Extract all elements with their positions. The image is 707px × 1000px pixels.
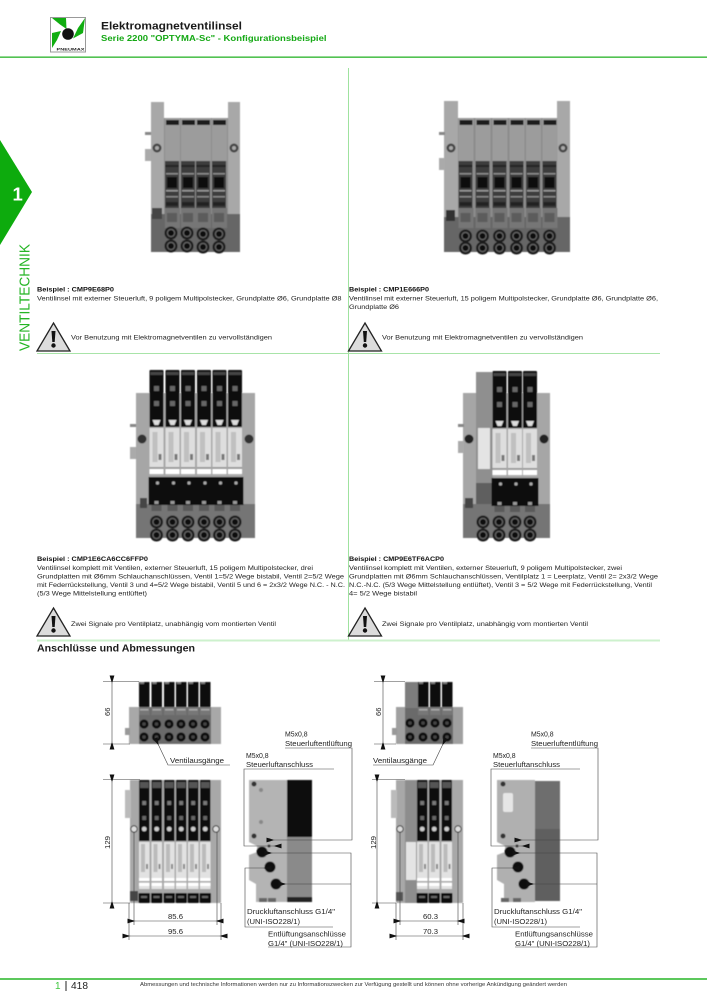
drawing: left side view with callouts: G1/4" (UNI-ISO228/1) <box>268 941 343 948</box>
header logo: PNEUMAX <box>56 46 85 52</box>
text: example 2 <box>349 286 658 311</box>
text: example 3: Beispiel : CMP1E6CA6CC6FFP0 <box>37 556 148 563</box>
photo: valve island CMP9E6TF6ACP0 <box>458 371 550 542</box>
drawing: right front view: 60.3 <box>423 912 438 921</box>
drawing: left side view with callouts: M5x0,8 <box>246 753 269 760</box>
page number: 1 <box>55 981 61 992</box>
text: example 4: Beispiel : CMP9E6TF6ACP0 <box>349 556 444 563</box>
drawing: right side view with callouts <box>491 732 598 948</box>
drawing: right side view with callouts: (UNI-ISO228/1) <box>494 919 547 926</box>
text: example 3 <box>37 556 345 598</box>
heading: connections and dimensions: Anschlüsse und Abmessungen <box>37 642 195 654</box>
drawing: left side view with callouts: Steuerluftentlüftung <box>285 741 352 748</box>
drawing: right side view with callouts: M5x0,8 <box>531 732 554 738</box>
text: example 1 <box>37 286 342 302</box>
drawing: left top view <box>103 682 230 765</box>
drawing: right side view with callouts: Druckluftanschluss G1/4" <box>494 909 583 916</box>
drawing: right side view with callouts: Steuerluftanschluss <box>493 762 561 769</box>
photo: valve island CMP1E6CA6CC6FFP0 <box>130 370 255 542</box>
warning 4 <box>348 608 589 636</box>
text: example 2: Beispiel : CMP1E666P0 <box>349 286 429 294</box>
chapter label: VENTILTECHNIK <box>16 244 34 351</box>
drawing: left side view with callouts: (UNI-ISO228/1) <box>247 919 300 926</box>
warning 3: Zwei Signale pro Ventilplatz, unabhängig vom montierten Ventil <box>71 621 277 628</box>
drawing: left side view with callouts: Steuerluftanschluss <box>246 762 314 769</box>
warning 3 <box>37 608 277 636</box>
text: example 1: Beispiel : CMP9E68P0 <box>37 286 114 294</box>
warning 4: Zwei Signale pro Ventilplatz, unabhängig vom montierten Ventil <box>382 621 589 628</box>
drawing: left front view: 129 <box>103 836 112 849</box>
drawing: right side view with callouts: Entlüftungsanschlüsse <box>515 932 593 938</box>
drawing: right side view with callouts: M5x0,8 <box>493 753 516 760</box>
warning 1 <box>37 323 272 351</box>
text: example 4: N.C.-N.C. (5/3 Wege Mittelstellung entlüftet), Ventil 3 = 5/2 Wege mit Federrückstellung, Ventil <box>349 582 653 589</box>
text: example 2: Ventilinsel mit externer Steuerluft, 15 poligem Multipolstecker, Grundplatte Ø6, Grundplatte Ø6, <box>349 296 658 302</box>
text: example 4: 4= 5/2 Wege bistabil <box>349 590 418 598</box>
drawing: right front view: 129 <box>369 836 378 849</box>
drawing: left side view with callouts: Entlüftungsanschlüsse <box>268 932 346 938</box>
chapter tab <box>0 140 32 245</box>
drawing: left top view: 66 <box>103 708 112 716</box>
text: example 3: (5/3 Wege Mittelstellung entlüftet) <box>37 590 147 598</box>
page number <box>55 981 88 992</box>
drawing: left side view with callouts: M5x0,8 <box>285 732 308 738</box>
footer disclaimer: Abmessungen und technische Informationen werden nur zu Informationszwecken zur Verfügung gestellt und können ohne vorherige Ankündigung geändert werden <box>140 982 567 988</box>
drawing: right front view: 70.3 <box>423 927 438 936</box>
drawing: left front view: 85.6 <box>168 912 183 921</box>
drawing: left front view <box>103 780 221 940</box>
text: example 3: mit Federrückstellung, Ventil 3 und 4=5/2 Wege bistabil, Ventil 5 und 6 = 2x3/2 Wege N.C. - N.C. <box>37 582 345 589</box>
drawing: right top view: 66 <box>374 708 383 716</box>
photo: valve island CMP9E68P0 <box>145 102 240 254</box>
drawing: right top view: Ventilausgänge <box>373 756 427 765</box>
chapter tab: 1 <box>12 184 23 204</box>
drawing: left side view with callouts <box>244 732 352 948</box>
drawing: right front view <box>369 780 463 940</box>
photo: valve island CMP1E666P0 <box>439 101 570 254</box>
subtitle: Serie 2200 "OPTYMA-Sc" - Konfigurationsbeispiel <box>101 33 326 43</box>
warning 1: Vor Benutzung mit Elektromagnetventilen zu vervollständigen <box>71 334 272 342</box>
drawing: right top view <box>373 682 463 765</box>
text: example 1: Ventilinsel mit externer Steuerluft, 9 poligem Multipolstecker, Grundplatte Ø6, Grundplatte Ø8 <box>37 296 342 302</box>
page number: 418 <box>71 981 88 992</box>
drawing: left top view: Ventilausgänge <box>170 756 224 765</box>
warning 2: Vor Benutzung mit Elektromagnetventilen zu vervollständigen <box>382 334 583 342</box>
text: example 2: Grundplatte Ø6 <box>349 304 399 311</box>
warning 2 <box>348 323 583 351</box>
text: example 3: Ventilinsel komplett mit Ventilen, externer Steuerluft, 15 poligem Multipolstecker, drei <box>37 565 314 572</box>
text: example 4: Grundplatten mit Ø6mm Schlauchanschlüssen, Ventilplatz 1 = Leerplatz, Ventil 2= 2x3/2 Wege <box>349 574 658 580</box>
title: Elektromagnetventilinsel <box>101 20 242 32</box>
header logo <box>50 18 86 52</box>
text: example 4: Ventilinsel komplett mit Ventilen, externer Steuerluft, 9 poligem Multipolstecker, zwei <box>349 565 623 572</box>
drawing: right side view with callouts: Steuerluftentlüftung <box>531 741 598 748</box>
drawing: left front view: 95.6 <box>168 927 183 936</box>
text: example 3: Grundplatten mit Ø6mm Schlauchanschlüssen, Ventil 1=5/2 Wege bistabil, Ventil 2=5/2 Wege <box>37 574 344 580</box>
drawing: right side view with callouts: G1/4" (UNI-ISO228/1) <box>515 941 590 948</box>
drawing: left side view with callouts: Druckluftanschluss G1/4" <box>247 909 336 916</box>
text: example 4 <box>349 556 658 598</box>
